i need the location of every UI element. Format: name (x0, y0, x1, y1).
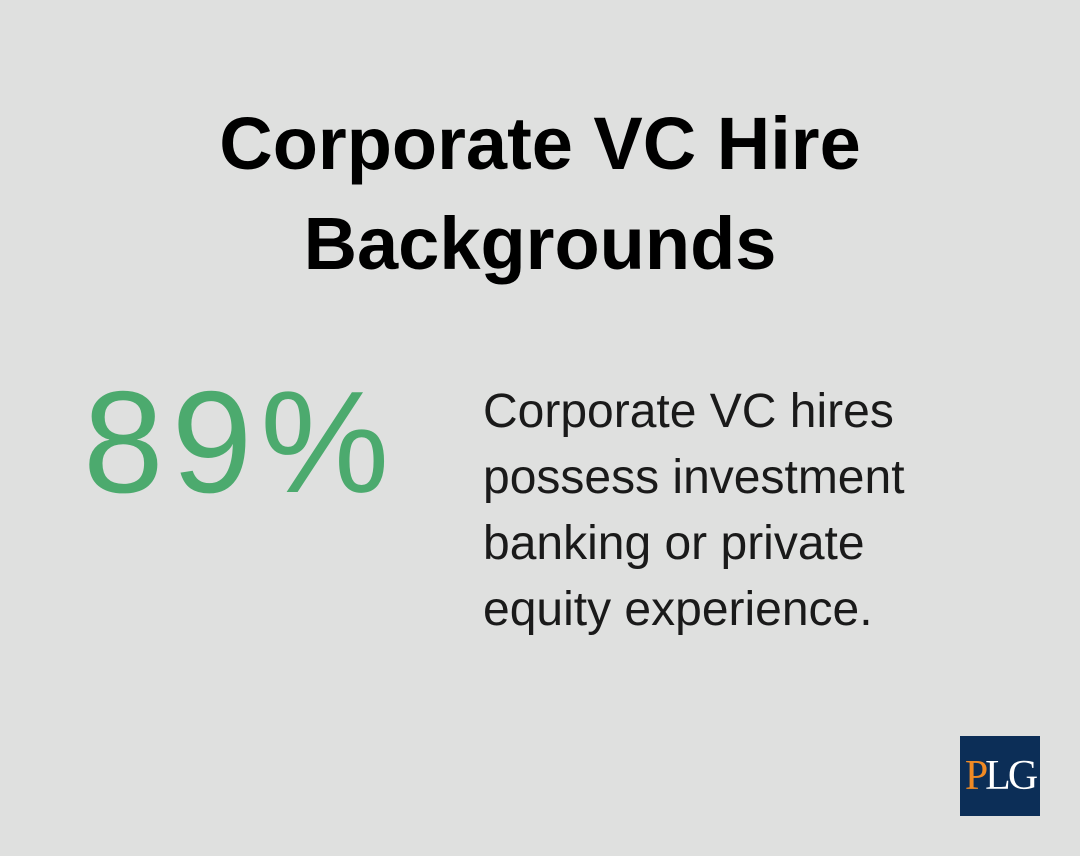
description text (483, 385, 905, 636)
description text: possess investment (483, 451, 905, 504)
title: Corporate VC Hire (219, 102, 861, 185)
title: Backgrounds (304, 202, 776, 285)
statistic: 89%: 89% (83, 361, 397, 523)
logo: PLG (960, 736, 1040, 816)
description text: equity experience. (483, 583, 873, 636)
title (219, 102, 861, 285)
description text: Corporate VC hires (483, 385, 894, 438)
logo: PLG: PLG (965, 753, 1035, 799)
description text: banking or private (483, 517, 865, 570)
